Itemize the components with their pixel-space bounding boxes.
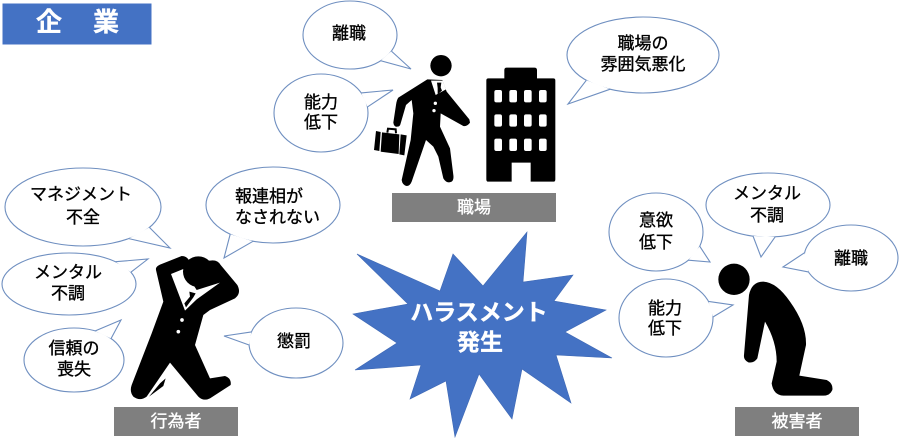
callout: resignation (workplace): 離職	[332, 24, 366, 43]
callout: mental illness (victim)	[706, 173, 830, 257]
starburst: harassment occurs	[353, 232, 612, 437]
callout: loss of trust	[24, 320, 124, 392]
callout: resignation (workplace)	[303, 1, 411, 69]
label: victim: 被害者	[772, 412, 822, 431]
callout: loss of trust: 喪失	[57, 360, 91, 379]
starburst: harassment occurs: ハラスメント	[410, 299, 548, 325]
callout: worsening atmosphere: 雰囲気悪化	[600, 55, 686, 74]
label: workplace	[392, 193, 556, 222]
callout: mental illness (perpetrator): メンタル	[34, 263, 102, 282]
callout: no reporting and consulting: 報連相が	[235, 187, 303, 206]
callout: reduced ability (victim)	[619, 279, 733, 357]
callout: lower motivation: 低下	[639, 233, 673, 252]
callout: management failure	[5, 168, 170, 248]
callout: resignation (victim)	[783, 225, 898, 291]
callout: reduced ability (victim): 能力	[648, 299, 682, 318]
heading: company: 企	[36, 7, 62, 37]
callout: mental illness (victim): メンタル	[733, 184, 801, 203]
callout: reduced ability (victim): 低下	[648, 319, 682, 338]
icon: perpetrator holding his head	[131, 256, 239, 400]
label: victim	[735, 407, 859, 436]
callout: mental illness (perpetrator)	[2, 253, 148, 315]
callout: no reporting and consulting: なされない	[235, 208, 320, 227]
callout: worsening atmosphere: 職場の	[618, 34, 668, 53]
callout: reduced ability (workplace): 能力	[304, 93, 338, 112]
callout: disciplinary action	[224, 308, 343, 378]
callout: worsening atmosphere	[567, 17, 719, 104]
label: workplace: 職場	[457, 198, 491, 217]
callout: management failure: 不全	[66, 208, 100, 227]
callout: lower motivation	[609, 193, 710, 271]
icon: office building	[486, 68, 555, 182]
heading: company	[2, 4, 152, 44]
starburst: harassment occurs: 発生	[457, 329, 503, 355]
callout: mental illness (perpetrator): 不調	[51, 284, 85, 303]
callout: reduced ability (workplace): 低下	[304, 113, 338, 132]
icon: walking businessman with briefcase	[374, 55, 470, 186]
callout: reduced ability (workplace)	[274, 74, 393, 152]
callout: loss of trust: 信頼の	[48, 339, 100, 358]
callout: lower motivation: 意欲	[639, 211, 673, 230]
label: perpetrator: 行為者	[150, 412, 202, 431]
label: perpetrator	[114, 407, 238, 436]
heading: company: 業	[93, 7, 119, 37]
callout: management failure: マネジメント	[30, 185, 132, 204]
callout: disciplinary action: 懲罰	[277, 332, 311, 351]
icon: victim kneeling and bowing	[718, 264, 832, 396]
callout: no reporting and consulting	[206, 167, 340, 258]
callout: mental illness (victim): 不調	[750, 206, 784, 225]
callout: resignation (victim): 離職	[834, 249, 868, 268]
